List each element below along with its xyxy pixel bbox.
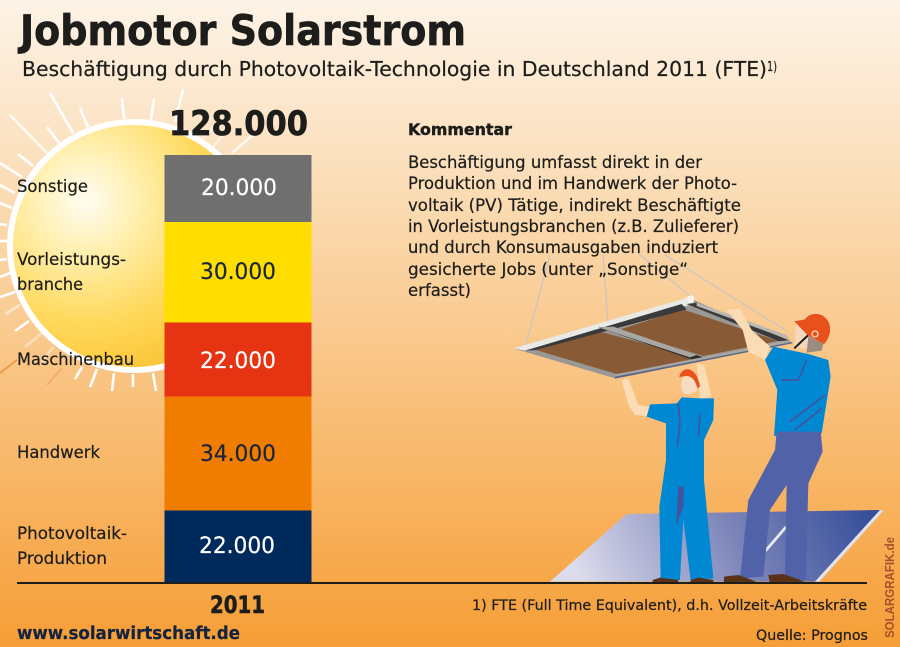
comment text: in Vorleistungsbranchen (z.B. Zulieferer) bbox=[408, 217, 739, 237]
segment: Photovoltaik-Produktion bbox=[164, 510, 312, 583]
solar module on ground bbox=[550, 510, 883, 582]
segment: Photovoltaik-Produktion: 22.000 bbox=[199, 533, 275, 559]
comment text: erfasst) bbox=[408, 281, 471, 301]
total value: 128.000 bbox=[169, 104, 308, 144]
comment text bbox=[408, 153, 741, 301]
segment: Vorleistungsbranche: 30.000 bbox=[200, 259, 276, 285]
category labels: Sonstige bbox=[17, 177, 88, 197]
title: Jobmotor Solarstrom bbox=[17, 6, 466, 55]
segment: Sonstige bbox=[164, 155, 312, 222]
category labels: Photovoltaik- bbox=[17, 524, 127, 544]
category labels: Handwerk bbox=[17, 443, 100, 463]
worker left bbox=[622, 363, 714, 583]
lifted panel bbox=[513, 295, 792, 379]
baseline bbox=[17, 582, 867, 584]
stacked bar chart bbox=[164, 155, 312, 583]
comment text: Produktion und im Handwerk der Photo- bbox=[408, 174, 737, 194]
category labels: Produktion bbox=[17, 549, 107, 569]
segment: Maschinenbau bbox=[164, 322, 312, 396]
category labels: Maschinenbau bbox=[17, 350, 134, 370]
website: www.solarwirtschaft.de bbox=[17, 623, 240, 644]
source: Quelle: Prognos bbox=[756, 628, 868, 644]
category labels: Vorleistungs- bbox=[17, 250, 126, 270]
segment: Sonstige: 20.000 bbox=[201, 175, 277, 201]
worker right bbox=[724, 308, 831, 583]
subtitle: Beschäftigung durch Photovoltaik-Technologie in Deutschland 2011 (FTE) bbox=[22, 57, 767, 81]
credit: SOLARGRAFIK.de bbox=[883, 537, 897, 638]
illustration: workers lifting solar panel bbox=[513, 253, 883, 583]
comment heading: Kommentar bbox=[408, 120, 512, 139]
category labels bbox=[17, 177, 134, 569]
comment text: voltaik (PV) Tätige, indirekt Beschäftigte bbox=[408, 196, 741, 216]
category labels: branche bbox=[17, 275, 83, 295]
icon: sun bbox=[0, 90, 258, 391]
segment: Maschinenbau: 22.000 bbox=[200, 348, 276, 374]
segment: Vorleistungsbranche bbox=[164, 222, 312, 322]
comment text: gesicherte Jobs (unter „Sonstige“ bbox=[408, 260, 688, 280]
year label: 2011 bbox=[210, 591, 265, 619]
subtitle: 1) bbox=[767, 60, 777, 75]
comment text: und durch Konsumausgaben induziert bbox=[408, 238, 718, 258]
comment text: Beschäftigung umfasst direkt in der bbox=[408, 153, 702, 173]
footnote: 1) FTE (Full Time Equivalent), d.h. Vollzeit-Arbeitskräfte bbox=[472, 598, 867, 614]
segment: Handwerk bbox=[164, 396, 312, 510]
segment: Handwerk: 34.000 bbox=[200, 441, 276, 467]
crane cables bbox=[526, 253, 785, 344]
